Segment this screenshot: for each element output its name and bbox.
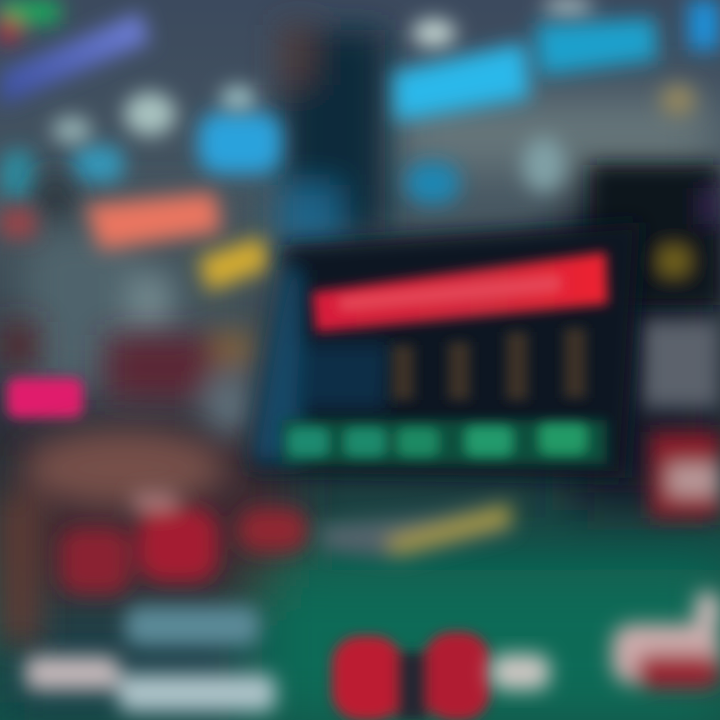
white chip lower centre — [490, 654, 550, 690]
red poker chips left — [60, 492, 308, 594]
monitor body — [248, 222, 640, 478]
top-left blue-purple sign — [0, 12, 150, 106]
salmon sign — [0, 192, 222, 250]
chips lower right — [612, 592, 720, 688]
top-left green and red sign — [0, 0, 60, 42]
green value row — [282, 420, 607, 464]
blue sign centre left — [0, 112, 282, 200]
pale ceiling lights — [52, 0, 696, 193]
cyan signs upper right — [392, 0, 720, 204]
person silhouette — [28, 174, 172, 382]
yellow card strip — [320, 502, 512, 558]
hand — [0, 430, 225, 645]
dark red figures mid left — [0, 322, 250, 433]
pink sign — [7, 378, 83, 418]
dark tower behind the monitor — [278, 25, 385, 245]
right red and white panel — [650, 432, 720, 518]
red chips lower centre — [332, 632, 490, 720]
red banner — [312, 252, 608, 332]
monitor — [248, 222, 640, 478]
right grey panel — [642, 320, 720, 408]
pale chips and cards lower left — [25, 606, 276, 712]
yellow sign — [198, 236, 270, 292]
right dark panel — [590, 165, 720, 305]
orange chart columns — [392, 328, 586, 400]
